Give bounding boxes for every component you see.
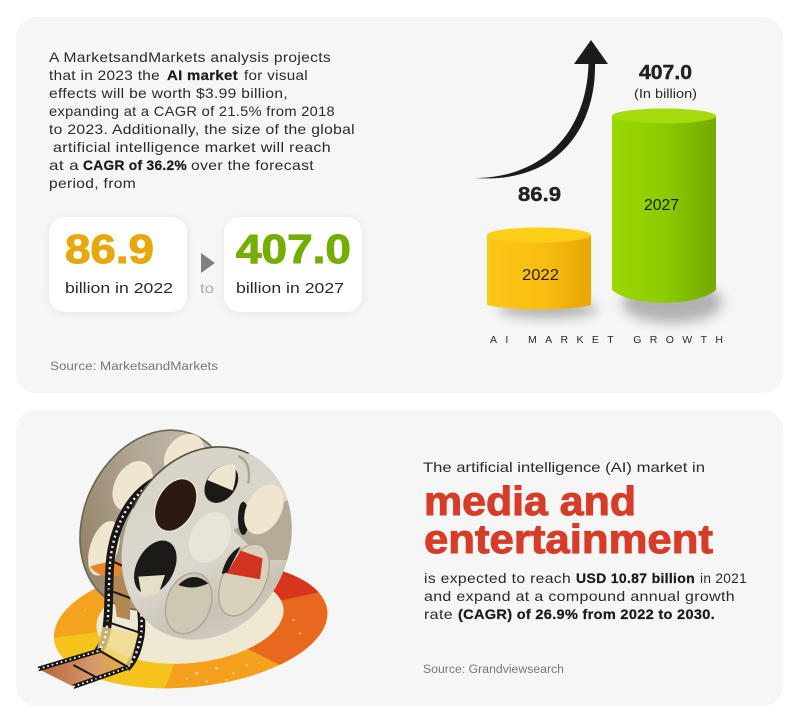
intro paragraph: artificial intelligence market will reach [53, 139, 331, 155]
body paragraph: USD 10.87 billion [576, 570, 695, 586]
chart: cylinders [475, 40, 723, 346]
body paragraph: and expand at a compound annual growth [424, 588, 735, 604]
cylinder 2027: 2027 [644, 197, 679, 214]
film strip [38, 477, 165, 687]
intro paragraph: at a [49, 157, 79, 173]
stat card: 86.9 billion in 2022 [49, 217, 187, 312]
stat card: 86.9 billion in 2022: 86.9 [65, 226, 154, 272]
panel: media and entertainment [16, 405, 783, 706]
stat card: 407.0 billion in 2027: billion in 2027 [236, 280, 344, 297]
stat card: 407.0 billion in 2027 [224, 217, 362, 312]
intro paragraph: effects will be worth $3.99 billion, [49, 85, 288, 101]
stat card: 86.9 billion in 2022: billion in 2022 [65, 280, 173, 297]
intro paragraph: over the forecast [191, 157, 314, 173]
cylinder 2027 [612, 108, 722, 323]
intro paragraph: that in 2023 the [49, 67, 160, 83]
heading: media and entertainment [424, 478, 713, 562]
body paragraph: is expected to reach [424, 570, 571, 586]
intro paragraph: CAGR of 36.2% [83, 157, 187, 173]
intro line: The artificial intelligence (AI) market in [423, 459, 705, 475]
intro paragraph: expanding at a CAGR of 21.5% from 2018 [49, 103, 335, 119]
source: MarketsandMarkets: Source: MarketsandMarkets [50, 361, 218, 373]
stat card: 407.0 billion in 2027: 407.0 [236, 226, 351, 272]
intro paragraph: period, from [49, 175, 136, 191]
inner disc [92, 564, 288, 673]
heading: media and entertainment: entertainment [424, 516, 713, 562]
panel: AI market growth [16, 17, 783, 393]
source: Grandviewsearch: Source: Grandviewsearch [423, 664, 564, 676]
arrow and connector: to: to [200, 280, 214, 296]
value label 407.0: 407.0 [639, 61, 692, 84]
coloured base disc [54, 572, 328, 688]
intro paragraph: AI market [167, 67, 238, 83]
body paragraph: (CAGR) of 26.9% from 2022 to 2030. [458, 606, 715, 622]
cylinder 2022 [487, 228, 598, 318]
value label 86.9: 86.9 [518, 183, 561, 206]
intro paragraph: for visual [244, 67, 308, 83]
body paragraph: rate [424, 606, 453, 622]
cylinder 2022: 2022 [522, 267, 559, 284]
body paragraph: in 2021 [700, 570, 747, 586]
intro paragraph: to 2023. Additionally, the size of the global [49, 121, 355, 137]
front reel [122, 446, 292, 640]
unit label: (In billion) [634, 86, 697, 101]
back reel [52, 405, 260, 635]
body paragraph [424, 570, 747, 622]
arrow and connector: to [200, 253, 215, 296]
chart title: AI MARKET GROWTH [490, 334, 723, 346]
heading: media and entertainment: media and [424, 478, 636, 524]
intro paragraph: A MarketsandMarkets analysis projects [49, 49, 331, 65]
intro paragraph [49, 49, 355, 191]
illustration: film reel [38, 429, 328, 689]
growth arrow [475, 40, 608, 178]
